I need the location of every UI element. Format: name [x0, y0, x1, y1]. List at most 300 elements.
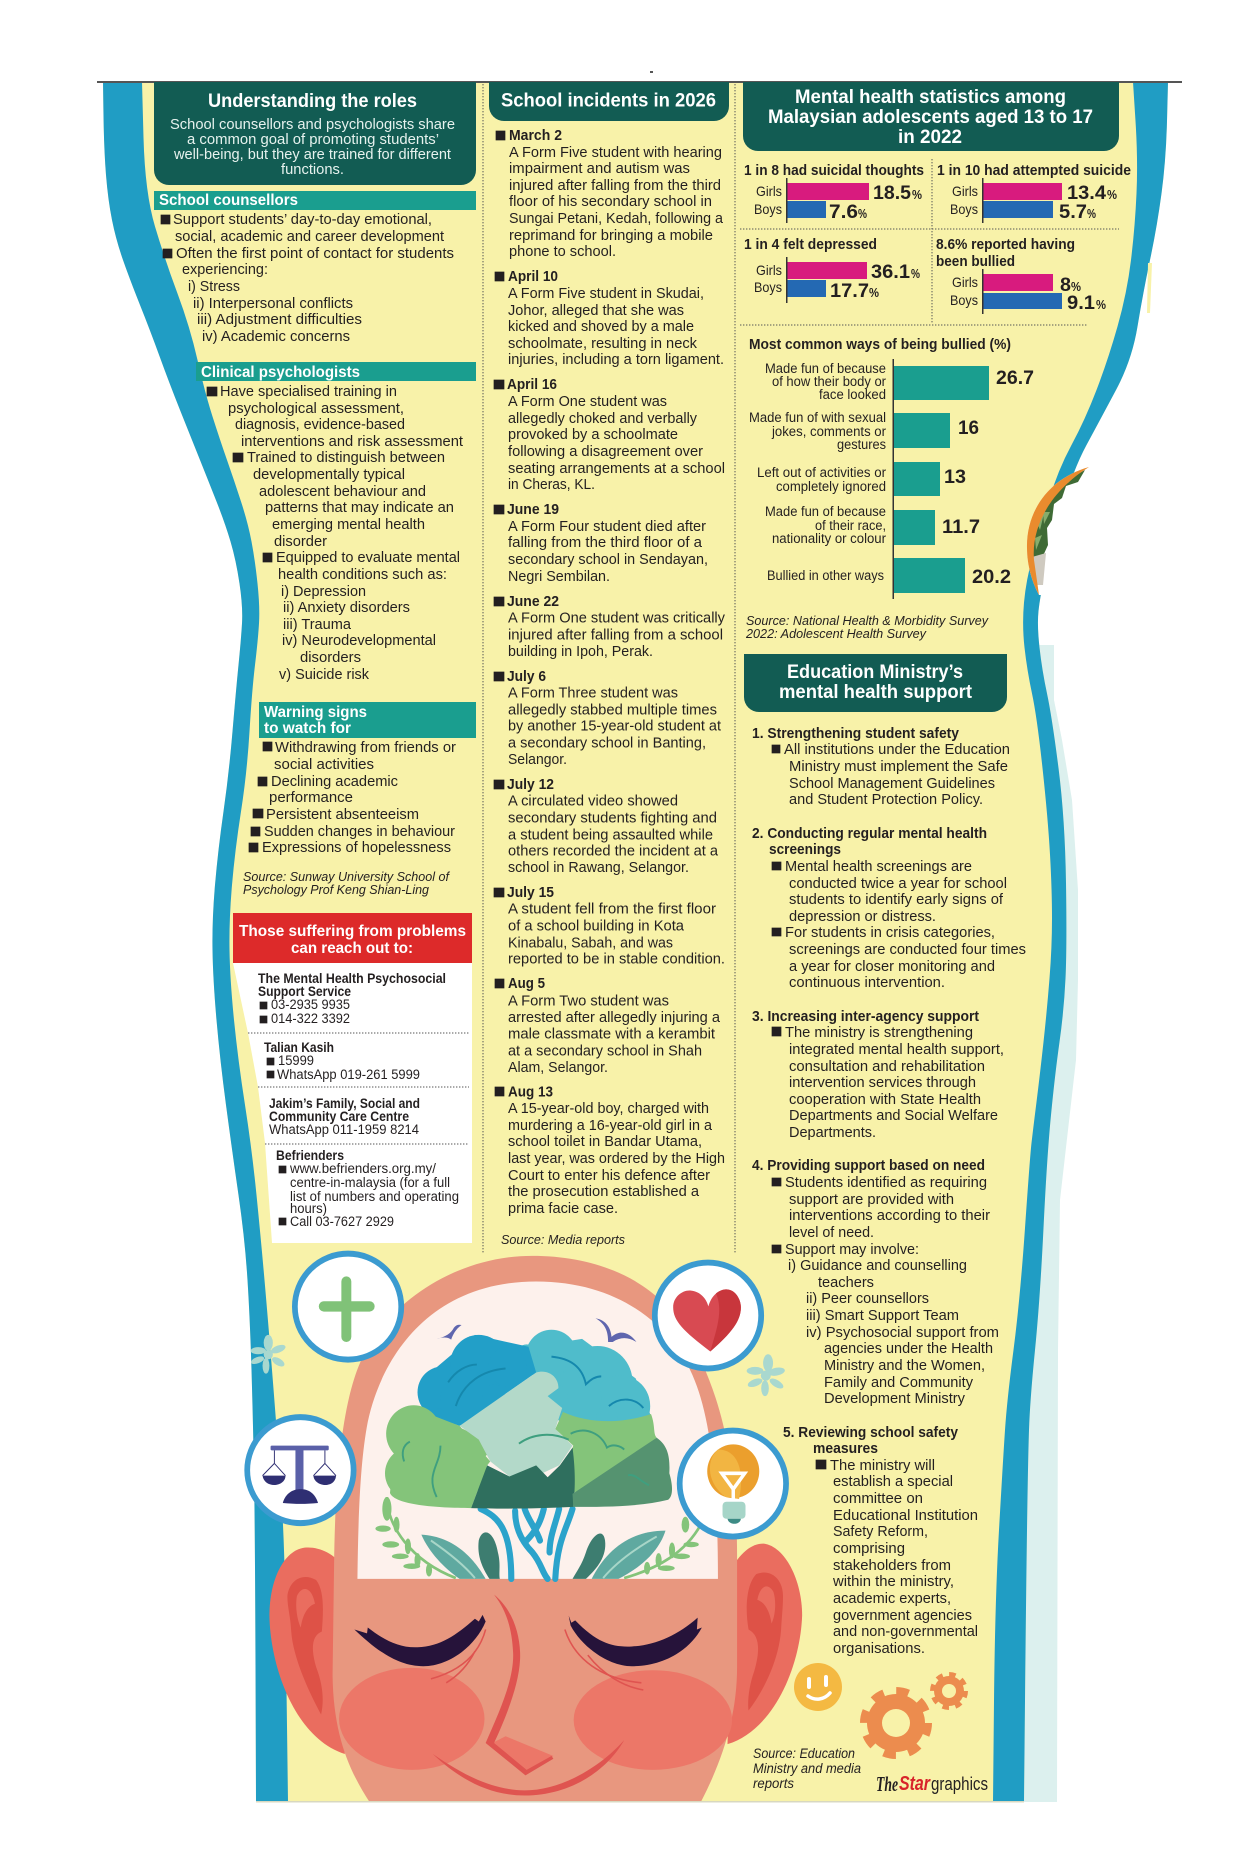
chart: most common ways of being bullied: completely ignored	[776, 479, 886, 494]
incident: Aug 13: Court to enter his defence after	[508, 1167, 710, 1184]
chart: reported being bullied: Boys	[950, 293, 978, 308]
header: school incidents	[489, 82, 729, 121]
incident: July 12: July 12	[507, 776, 554, 793]
chart: most common ways of being bullied: jokes, comments or	[771, 424, 887, 439]
item 5: school safety measures: government agencies	[833, 1607, 972, 1624]
item 2: mental health screenings: continuous intervention.	[789, 974, 945, 991]
chart: reported being bullied: %	[1096, 298, 1106, 312]
item 4: support based on need: ii) Peer counsellors	[806, 1290, 929, 1307]
chart: reported being bullied	[936, 237, 1106, 314]
incident: Aug 13: school toilet in Bandar Utama,	[508, 1133, 702, 1150]
source: Education Ministry	[753, 1746, 861, 1791]
item 5: school safety measures: measures	[813, 1440, 878, 1457]
chart: attempted suicide: %	[1107, 188, 1117, 202]
chart: felt depressed: 17.7	[830, 280, 869, 302]
item 1: student safety: and Student Protection Policy.	[789, 791, 983, 808]
item 5: school safety measures: Safety Reform,	[833, 1523, 928, 1540]
incident: March 2: injured after falling from the third	[509, 177, 721, 194]
panel: helplines: 15999	[278, 1053, 314, 1068]
chart: most common ways of being bullied: 16	[958, 417, 979, 439]
chart: felt depressed: Boys	[754, 280, 782, 295]
item 1: student safety: Ministry must implement the Safe	[789, 758, 1008, 775]
item 4: support based on need: i) Guidance and counselling	[788, 1257, 967, 1274]
incident: April 10: schoolmate, resulting in neck	[508, 335, 697, 352]
incident: Aug 13	[495, 1084, 725, 1217]
logo: The Star graphics: graphics	[931, 1774, 988, 1794]
item 5: school safety measures: organisations.	[833, 1640, 925, 1657]
section: clinical psychologists: patterns that may indicate an	[265, 499, 454, 516]
chart: attempted suicide: Boys	[950, 202, 978, 217]
incident: July 12: secondary students fighting and	[508, 809, 717, 826]
chart: most common ways of being bullied: 20.2	[972, 566, 1011, 588]
incident: July 12: others recorded the incident at a	[508, 842, 719, 859]
source: Education Ministry: Ministry and media	[753, 1761, 861, 1776]
section: clinical psychologists: adolescent behaviour and	[259, 483, 426, 500]
panel: helplines: hours)	[290, 1201, 327, 1216]
chart: felt depressed: %	[911, 267, 920, 281]
incident: July 12: a student being assaulted while	[508, 826, 713, 843]
incident: April 10	[495, 268, 724, 368]
section: warning signs: Sudden changes in behaviour	[264, 823, 455, 840]
section: clinical psychologists: Clinical psychologists	[201, 364, 360, 381]
helplines heading: can reach out to:	[291, 940, 413, 957]
chart: most common ways of being bullied: Most common ways of being bullied (%)	[749, 337, 1011, 353]
item 4: support based on need: support are provided with	[789, 1191, 954, 1208]
light blue lobe	[516, 1330, 651, 1437]
section: school counsellors: i) Stress	[188, 278, 240, 295]
incident: Aug 13: Aug 13	[508, 1084, 553, 1100]
item 4: support based on need: 4. Providing support based on need	[752, 1157, 985, 1174]
incident: June 22: A Form One student was critically	[508, 610, 725, 626]
header: Education Ministry: mental health support	[779, 682, 973, 703]
wrinkles	[431, 1629, 643, 1690]
section: clinical psychologists: disorders	[300, 649, 361, 666]
panel: helplines: Call 03-7627 2929	[290, 1214, 394, 1229]
incident: July 15: Kinabalu, Sabah, and was	[508, 934, 673, 951]
chart: attempted suicide: 13.4	[1067, 182, 1106, 204]
panel: Education Ministry support	[744, 654, 1026, 1657]
section: warning signs: Persistent absenteeism	[266, 806, 419, 823]
icon: leaves and roots	[375, 1497, 701, 1579]
chart: suicidal thoughts: %	[912, 188, 922, 202]
item 5: school safety measures: stakeholders from	[833, 1557, 951, 1574]
incident: July 15	[494, 884, 725, 967]
chart: felt depressed: 1 in 4 felt depressed	[744, 237, 877, 253]
incident: July 12: school in Rawang, Selangor.	[508, 859, 689, 876]
chart: felt depressed: 36.1	[871, 261, 910, 283]
panel: helplines: Support Service	[258, 984, 351, 999]
header: Education Ministry: Education Ministry’s	[787, 662, 963, 683]
incident: April 16: A Form One student was	[508, 393, 667, 410]
section: warning signs: performance	[269, 789, 353, 806]
blue right band	[993, 82, 1168, 1802]
chart: suicidal thoughts: Girls	[756, 184, 782, 199]
header: school incidents: School incidents in 2026	[501, 90, 716, 112]
icon: face	[333, 1256, 737, 1802]
item 4: support based on need	[752, 1157, 999, 1407]
header: understanding the roles: Understanding the roles	[208, 91, 417, 112]
incident: March 2: impairment and autism was	[509, 160, 690, 177]
incident: Aug 5: A Form Two student was	[508, 992, 669, 1009]
incident: March 2: March 2	[509, 127, 562, 144]
item 4: support based on need: Family and Community	[824, 1374, 973, 1391]
header: understanding the roles: a common goal of promoting students’	[187, 132, 439, 148]
panel: helplines: Jakim’s Family, Social and	[269, 1096, 420, 1111]
incident: April 16: April 16	[507, 376, 557, 393]
header: understanding the roles: well-being, but they are trained for different	[173, 147, 451, 163]
incident: July 12: A circulated video showed	[508, 792, 678, 810]
incident: Aug 5: Aug 5	[508, 975, 545, 992]
panel: helplines: Befrienders	[276, 1148, 344, 1163]
eyes	[354, 1615, 702, 1666]
logo: The Star graphics: Star	[899, 1773, 931, 1795]
chart: reported being bullied: 8.6% reported having	[936, 237, 1075, 253]
incident: July 15: of a school building in Kota	[508, 917, 685, 934]
source: Education Ministry: reports	[753, 1776, 794, 1791]
item 3: inter-agency support: intervention services through	[789, 1074, 976, 1091]
panel: helplines: 03-2935 9935	[271, 997, 350, 1012]
chart: felt depressed	[744, 237, 920, 303]
section: clinical psychologists: iii) Trauma	[283, 616, 352, 633]
icon: light bulb	[680, 1431, 786, 1537]
item 4: support based on need: Development Ministry	[824, 1390, 965, 1407]
yellow background panel	[103, 82, 1168, 1802]
incident: April 16: in Cheras, KL.	[508, 476, 595, 493]
header: statistics	[743, 82, 1119, 151]
item 4: support based on need: interventions according to their	[789, 1207, 990, 1224]
mid green lobe	[573, 1438, 672, 1507]
panel: helplines: The Mental Health Psychosocial	[258, 971, 446, 986]
panel: helplines: 014-322 3392	[271, 1011, 350, 1026]
item 2: mental health screenings: screenings	[769, 841, 841, 858]
section: clinical psychologists: v) Suicide risk	[279, 666, 369, 683]
item 2: mental health screenings: Mental health screenings are	[785, 858, 972, 875]
chart: reported being bullied: been bullied	[936, 254, 1015, 270]
item 5: school safety measures: Educational Institution	[833, 1507, 978, 1524]
chart: most common ways of being bullied: Made fun of with sexual	[749, 410, 886, 425]
icon: plus	[295, 1254, 401, 1360]
column dividers	[483, 84, 735, 1253]
item 1: student safety: School Management Guidelines	[789, 775, 995, 792]
chart: reported being bullied: 9.1	[1067, 292, 1095, 314]
item 5: school safety measures	[783, 1424, 978, 1657]
item 3: inter-agency support: cooperation with State Health	[789, 1091, 981, 1108]
chart: felt depressed: %	[869, 286, 879, 300]
incident: April 10: injuries, including a torn ligament.	[508, 351, 724, 368]
panel: helplines	[233, 913, 472, 1243]
icon: small gear	[932, 1674, 966, 1708]
item 2: mental health screenings	[752, 825, 1026, 991]
item 2: mental health screenings: depression or distress.	[789, 908, 936, 925]
section: clinical psychologists: ii) Anxiety disorders	[283, 599, 410, 616]
chart: most common ways of being bullied: Made fun of because	[765, 361, 886, 376]
section: clinical psychologists: Trained to distinguish between	[247, 449, 445, 466]
chart: attempted suicide	[937, 163, 1131, 223]
item 4: support based on need: level of need.	[789, 1224, 874, 1241]
pale centre lobe	[460, 1372, 573, 1476]
section: clinical psychologists: psychological assessment,	[228, 400, 404, 417]
cheeks	[339, 1668, 732, 1770]
incident: March 2	[496, 127, 724, 260]
panel: understanding the roles	[154, 82, 476, 1243]
icon: large gear	[864, 1691, 928, 1755]
section: clinical psychologists: disorder	[274, 533, 327, 550]
chart: suicidal thoughts: %	[858, 207, 867, 221]
incident: July 6	[494, 668, 722, 768]
incident: April 16: seating arrangements at a school	[508, 460, 725, 477]
incident: March 2: phone to school.	[509, 243, 616, 260]
icon: heart	[655, 1263, 761, 1369]
icon: left flower	[250, 1335, 287, 1374]
item 4: support based on need: Ministry and the Women,	[824, 1357, 985, 1374]
incident: June 22: injured after falling from a school	[508, 626, 723, 643]
pale side strip	[1024, 645, 1078, 1802]
item 3: inter-agency support	[752, 1008, 1004, 1141]
incident: July 6: July 6	[507, 668, 546, 685]
chart: most common ways of being bullied: nationality or colour	[772, 531, 887, 546]
chart: suicidal thoughts: Boys	[754, 202, 782, 217]
photo roundel fragment	[1027, 467, 1130, 595]
incident: Aug 5: male classmate with a kerambit	[508, 1025, 716, 1042]
section: warning signs: Expressions of hopelessness	[262, 839, 451, 856]
logo: The Star graphics	[876, 1772, 988, 1796]
item 5: school safety measures: and non-governmental	[833, 1623, 978, 1640]
panel: school incidents	[489, 82, 729, 1247]
incident: July 15: reported to be in stable condition.	[508, 950, 725, 967]
section: clinical psychologists: Equipped to evaluate mental	[276, 549, 460, 566]
section: warning signs: Warning signs	[264, 704, 367, 721]
incident: Aug 5: arrested after allegedly injuring a	[508, 1009, 721, 1026]
incident: July 6: allegedly stabbed multiple times	[508, 702, 717, 718]
chart: reported being bullied: 8	[1060, 274, 1071, 296]
icon: right ear	[728, 1544, 802, 1744]
incident: June 19	[494, 501, 708, 585]
incident: June 22: June 22	[507, 593, 559, 610]
section: clinical psychologists: emerging mental health	[272, 516, 425, 533]
panel: helplines: centre-in-malaysia (for a full	[290, 1175, 450, 1190]
chart: most common ways of being bullied: gestures	[837, 437, 886, 452]
source: National Health survey: Source: National Health & Morbidity Survey	[746, 613, 989, 628]
brain background	[357, 1282, 718, 1579]
section: school counsellors: iii) Adjustment difficulties	[197, 311, 362, 328]
item 3: inter-agency support: 3. Increasing inter-agency support	[752, 1008, 979, 1025]
incident: July 6: Selangor.	[508, 751, 567, 768]
chart: reported being bullied: Girls	[952, 275, 978, 290]
item 5: school safety measures: within the ministry,	[832, 1573, 954, 1590]
icon: scales	[247, 1417, 354, 1523]
header: understanding the roles	[154, 82, 476, 185]
foliage detail	[448, 1357, 643, 1408]
header: statistics: Mental health statistics among	[795, 87, 1066, 108]
header: statistics: Malaysian adolescents aged 13 to 17	[768, 107, 1093, 128]
chart: most common ways of being bullied: 13	[944, 466, 966, 488]
item 1: student safety: All institutions under the Education	[784, 741, 1010, 758]
header: Education Ministry	[744, 654, 1007, 712]
illustration: head with tree brain	[247, 1254, 802, 1802]
section: clinical psychologists	[196, 362, 476, 683]
item 2: mental health screenings: a year for closer monitoring and	[789, 958, 995, 975]
incident: April 16: following a disagreement over	[508, 443, 703, 460]
helplines heading	[233, 913, 472, 963]
item 2: mental health screenings: For students in crisis categories,	[785, 924, 995, 941]
icon: right flower	[747, 1354, 785, 1396]
incident: April 10: Johor, alleged that she was	[508, 302, 684, 319]
item 1: student safety: 1. Strengthening student safety	[752, 725, 960, 742]
chart: suicidal thoughts: 18.5	[873, 182, 911, 204]
incident: July 15: A student fell from the first floor	[508, 900, 716, 918]
item 3: inter-agency support: The ministry is strengthening	[785, 1024, 973, 1041]
section: warning signs	[249, 702, 476, 856]
item 4: support based on need: Students identified as requiring	[785, 1174, 987, 1191]
section: school counsellors: Often the first point of contact for students	[176, 245, 454, 262]
incident: June 19: Negri Sembilan.	[508, 568, 610, 585]
section: school counsellors: Support students’ day-to-day emotional,	[173, 211, 432, 228]
incident: April 16: allegedly choked and verbally	[508, 410, 697, 427]
incident: April 10: A Form Five student in Skudai,	[508, 285, 704, 302]
item 3: inter-agency support: integrated mental health support,	[789, 1041, 1004, 1058]
header: understanding the roles: School counsellors and psychologists share	[170, 117, 455, 133]
section: warning signs: to watch for	[264, 720, 351, 737]
section: clinical psychologists: diagnosis, evidence-based	[235, 416, 405, 433]
incident: June 19: falling from the third floor of a	[508, 534, 703, 551]
section: clinical psychologists: health conditions such as:	[278, 566, 447, 583]
chart: most common ways of being bullied: Bullied in other ways	[767, 568, 884, 583]
item 3: inter-agency support: consultation and rehabilitation	[789, 1058, 985, 1075]
section: school counsellors: School counsellors	[159, 192, 298, 209]
section: school counsellors: ii) Interpersonal conflicts	[193, 295, 353, 312]
chart: suicidal thoughts	[744, 163, 924, 223]
item 2: mental health screenings: students to identify early signs of	[789, 891, 1004, 908]
incident: June 22	[494, 593, 725, 660]
header: statistics: in 2022	[898, 127, 962, 148]
incident: Aug 13: last year, was ordered by the High	[508, 1150, 725, 1167]
incident: June 19: A Form Four student died after	[508, 518, 706, 535]
item 2: mental health screenings: screenings are conducted four times	[789, 941, 1026, 958]
section: school counsellors: iv) Academic concerns	[202, 328, 350, 345]
incident: March 2: floor of his secondary school in	[509, 193, 712, 210]
source: National Health survey: 2022: Adolescent Health Survey	[745, 626, 927, 641]
incident: July 12	[494, 776, 719, 876]
chart: most common ways of being bullied: Made fun of because	[765, 504, 886, 519]
incident: June 22: building in Ipoh, Perak.	[508, 643, 653, 660]
item 4: support based on need: Support may involve:	[785, 1241, 919, 1258]
left green lobe	[385, 1405, 491, 1508]
section: school counsellors: social, academic and career development	[175, 228, 445, 245]
incident: March 2: reprimand for bringing a mobile	[509, 227, 713, 244]
logo: The Star graphics: The	[876, 1772, 898, 1796]
item 4: support based on need: agencies under the Health	[824, 1340, 993, 1357]
source: Education Ministry: Source: Education	[753, 1746, 855, 1761]
section: warning signs: Withdrawing from friends or	[275, 739, 456, 756]
chart: most common ways of being bullied: Left out of activities or	[757, 465, 887, 480]
section: warning signs: social activities	[274, 756, 374, 773]
item 5: school safety measures: The ministry will	[830, 1457, 935, 1474]
item 4: support based on need: iv) Psychosocial support from	[806, 1324, 999, 1341]
chart: most common ways of being bullied: 11.7	[942, 516, 980, 538]
chart: attempted suicide: %	[1087, 207, 1096, 221]
panel: helplines: WhatsApp 011-1959 8214	[269, 1122, 420, 1137]
blue left band	[103, 82, 288, 1802]
chart: felt depressed: Girls	[756, 263, 782, 278]
chart: most common ways of being bullied: face looked	[819, 387, 886, 402]
incident: June 19: June 19	[507, 501, 559, 518]
panel: helplines: list of numbers and operating	[290, 1189, 459, 1204]
chart: suicidal thoughts: 1 in 8 had suicidal thoughts	[744, 163, 924, 179]
chart: attempted suicide: Girls	[952, 184, 978, 199]
item 3: inter-agency support: Departments and Social Welfare	[789, 1107, 998, 1124]
item 5: school safety measures: 5. Reviewing school safety	[783, 1424, 959, 1441]
section: clinical psychologists: iv) Neurodevelopmental	[282, 632, 436, 649]
incident: April 16: provoked by a schoolmate	[508, 426, 678, 443]
chart: attempted suicide: 1 in 10 had attempted suicide	[937, 163, 1131, 179]
icon: birds	[437, 1318, 636, 1342]
source: Sunway University: Psychology Prof Keng Shian-Ling	[243, 882, 430, 897]
item 1: student safety	[752, 725, 1010, 808]
nose	[490, 1736, 553, 1775]
panel: helplines: www.befrienders.org.my/	[289, 1161, 436, 1176]
item 5: school safety measures: committee on	[833, 1490, 923, 1507]
section: warning signs: Declining academic	[271, 773, 398, 790]
helplines heading: Those suffering from problems	[239, 923, 466, 940]
item 2: mental health screenings: 2. Conducting regular mental health	[752, 825, 987, 842]
section: clinical psychologists: interventions and risk assessment	[241, 433, 464, 450]
panel: mental health statistics	[740, 82, 1131, 641]
panel: helplines: Community Care Centre	[269, 1109, 409, 1124]
source: Sunway University: Source: Sunway University School of	[243, 869, 450, 884]
section: clinical psychologists: i) Depression	[281, 583, 366, 600]
right green lobe	[555, 1412, 657, 1494]
incident: July 6: A Form Three student was	[508, 684, 678, 702]
incident: Aug 13: prima facie case.	[508, 1200, 618, 1217]
incident: Aug 13: the prosecution established a	[508, 1183, 700, 1200]
incident: July 6: a secondary school in Banting,	[508, 734, 706, 751]
dark blue lobe	[418, 1335, 536, 1428]
item 5: school safety measures: academic experts,	[833, 1590, 951, 1607]
incident: March 2: A Form Five student with hearing	[509, 144, 722, 161]
chart: most common ways of being bullied	[749, 337, 1034, 599]
icon: left ear	[269, 1547, 345, 1754]
incident: Aug 5: at a secondary school in Shah	[508, 1042, 702, 1059]
section: school counsellors: experiencing:	[182, 261, 268, 278]
item 2: mental health screenings: conducted twice a year for school	[789, 875, 1007, 892]
incident: Aug 5: Alam, Selangor.	[508, 1059, 608, 1076]
panel: helplines: Talian Kasih	[264, 1040, 334, 1055]
source: Sunway University	[243, 869, 450, 897]
incident: March 2: Sungai Petani, Kedah, following a	[509, 210, 724, 227]
mouth	[433, 1740, 624, 1796]
header: understanding the roles: functions.	[281, 162, 344, 178]
section: clinical psychologists: developmentally typical	[253, 466, 405, 483]
icon: tree brain	[385, 1330, 672, 1509]
section: school counsellors	[154, 191, 476, 345]
incident: July 6: by another 15-year-old student at	[508, 718, 722, 734]
item 4: support based on need: teachers	[818, 1274, 874, 1291]
source: National Health survey	[745, 613, 989, 641]
incident: Aug 13: murdering a 16-year-old girl in a	[508, 1117, 713, 1134]
chart: reported being bullied: %	[1071, 280, 1081, 294]
section: clinical psychologists: Have specialised training in	[220, 383, 397, 400]
panel: helplines: WhatsApp 019-261 5999	[277, 1067, 420, 1082]
dark green lobe	[471, 1448, 575, 1509]
chart: most common ways of being bullied: 26.7	[996, 367, 1034, 389]
incident: April 10: April 10	[508, 268, 558, 285]
incident: Aug 5	[495, 975, 721, 1076]
incident: Aug 13: A 15-year-old boy, charged with	[508, 1100, 709, 1117]
chart: most common ways of being bullied: of how their body or	[772, 374, 887, 389]
top rule	[97, 81, 1182, 83]
incident: July 15: July 15	[507, 884, 554, 901]
item 3: inter-agency support: Departments.	[789, 1124, 876, 1141]
